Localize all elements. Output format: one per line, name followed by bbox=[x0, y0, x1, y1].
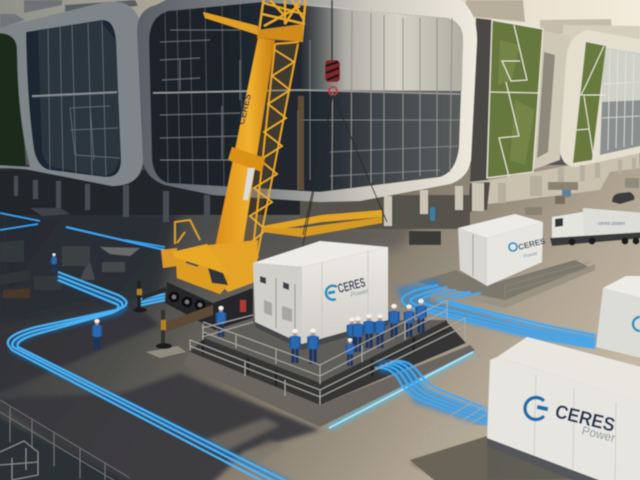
bottom-left fence bbox=[0, 400, 130, 480]
workers on platform bbox=[289, 299, 427, 366]
sky bbox=[0, 0, 640, 65]
blue cable bundle, lower bbox=[375, 361, 488, 425]
front logo sub-line: Power bbox=[580, 423, 617, 445]
main container bbox=[253, 241, 388, 350]
crane boom bbox=[203, 0, 306, 264]
logo ring bbox=[326, 286, 337, 300]
building module 2 frame bbox=[137, 0, 477, 202]
foreground platform and rail bbox=[410, 393, 487, 480]
rooftop volumes bbox=[0, 0, 640, 60]
left storage area with pallets bbox=[0, 208, 140, 298]
left green wall bbox=[0, 30, 26, 170]
logo sub-line: Power bbox=[350, 287, 370, 299]
site details: bins, pallets and car bbox=[409, 178, 639, 245]
back platform bbox=[416, 257, 595, 308]
lower glowing line bbox=[329, 352, 473, 428]
ground shadows bbox=[0, 205, 640, 480]
outrigger left bbox=[133, 281, 147, 312]
right side structure bbox=[468, 18, 640, 212]
green wall panel bbox=[487, 20, 543, 178]
green wall panel 2 bbox=[573, 42, 606, 163]
platform railings bbox=[190, 300, 465, 405]
building module 2 glass bbox=[149, 2, 463, 192]
platform deck bbox=[204, 318, 447, 383]
front container bbox=[487, 337, 640, 480]
crane chassis bbox=[142, 282, 253, 332]
right container bbox=[596, 276, 640, 359]
back container: Power bbox=[523, 251, 539, 260]
front logo wordmark: CERES bbox=[553, 401, 617, 437]
outrigger front bbox=[146, 310, 186, 358]
ground bbox=[0, 165, 640, 480]
third building module bbox=[560, 30, 640, 167]
crane cab and superstructure bbox=[161, 220, 258, 294]
platform base bbox=[183, 345, 475, 427]
main platform bbox=[183, 318, 475, 427]
back container: CERES bbox=[517, 236, 547, 252]
blue line segments, top left bbox=[0, 213, 165, 250]
truck bbox=[550, 208, 640, 246]
bottom-left scaffold box bbox=[0, 441, 38, 480]
boom head lattice bbox=[259, 0, 306, 38]
truck: ceres power bbox=[598, 221, 626, 227]
building module 1 bbox=[0, 2, 143, 186]
platform dark gap bbox=[204, 322, 447, 392]
logo wordmark: CERES bbox=[336, 275, 367, 296]
lifting frame bbox=[263, 210, 382, 237]
building underside columns bbox=[0, 158, 636, 230]
crane boom: CERES bbox=[236, 93, 253, 125]
back container bbox=[458, 214, 547, 286]
blue cable bundle, left bbox=[8, 272, 292, 480]
blue cable bundle, centre right bbox=[402, 284, 596, 348]
jib bbox=[203, 12, 258, 35]
crane hook and cables bbox=[298, 0, 387, 270]
workers on ground bbox=[51, 253, 226, 350]
